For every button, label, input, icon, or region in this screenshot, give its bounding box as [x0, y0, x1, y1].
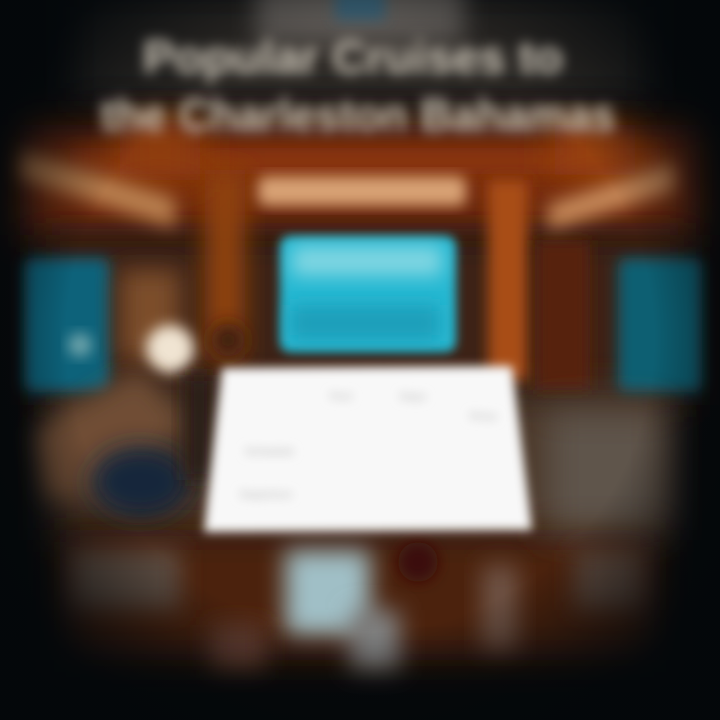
- side window: right: [618, 258, 702, 392]
- seating and figures: [35, 323, 665, 610]
- schedule table card: [204, 366, 532, 532]
- table text: [240, 391, 497, 501]
- side window: left: [24, 258, 110, 392]
- table text: Schedule: [245, 446, 294, 458]
- lamp: [146, 325, 194, 373]
- wall panel left: [120, 270, 180, 360]
- table text: Departure: [240, 489, 292, 501]
- title: the Charleston Bahamas: [100, 89, 616, 141]
- table text: Days: [400, 391, 426, 403]
- ceiling lights: [20, 150, 675, 230]
- ceiling beams: [70, 120, 660, 390]
- floor reflections: [210, 542, 518, 670]
- table text: Port: [330, 391, 352, 403]
- table text: Price: [470, 411, 497, 423]
- central window: sea: [280, 236, 456, 352]
- title: Popular Cruises to: [143, 31, 563, 83]
- title: [100, 31, 616, 141]
